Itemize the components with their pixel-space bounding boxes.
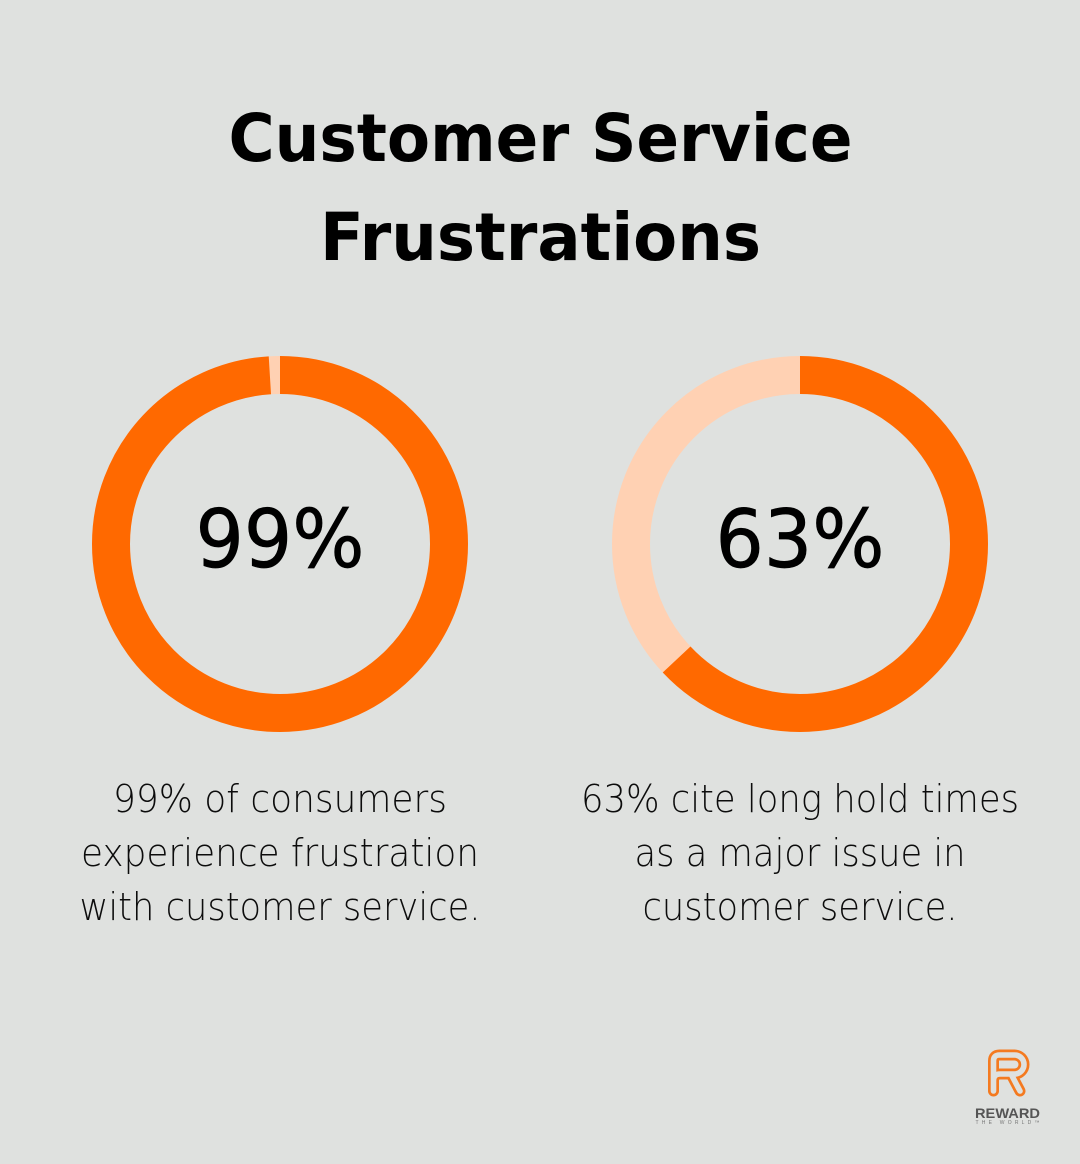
caption: 63%: customer service.	[642, 885, 958, 929]
panel: 99% frustrated consumers	[80, 375, 480, 929]
logo: Reward the World	[975, 1055, 1040, 1126]
caption: 99%: 99% of consumers	[113, 777, 447, 821]
donut chart: 63%	[631, 375, 969, 713]
title	[228, 100, 852, 276]
title: Frustrations	[320, 199, 761, 276]
caption: 99%	[80, 777, 480, 929]
caption: 63%	[581, 777, 1019, 929]
donut chart: 99%	[111, 375, 449, 713]
caption: 63%: 63% cite long hold times	[581, 777, 1019, 821]
caption: 99%: with customer service.	[80, 885, 480, 929]
panel: 63% long hold times	[581, 375, 1019, 929]
logo wordmark: REWARD	[975, 1105, 1040, 1121]
value: 99%: 99%	[196, 493, 364, 586]
value: 63%: 63%	[716, 493, 884, 586]
caption: 99%: experience frustration	[81, 831, 479, 875]
title: Customer Service	[228, 100, 852, 177]
logo tagline: THE WORLD™	[976, 1120, 1040, 1126]
icon: R mark	[994, 1055, 1024, 1091]
caption: 63%: as a major issue in	[634, 831, 966, 875]
